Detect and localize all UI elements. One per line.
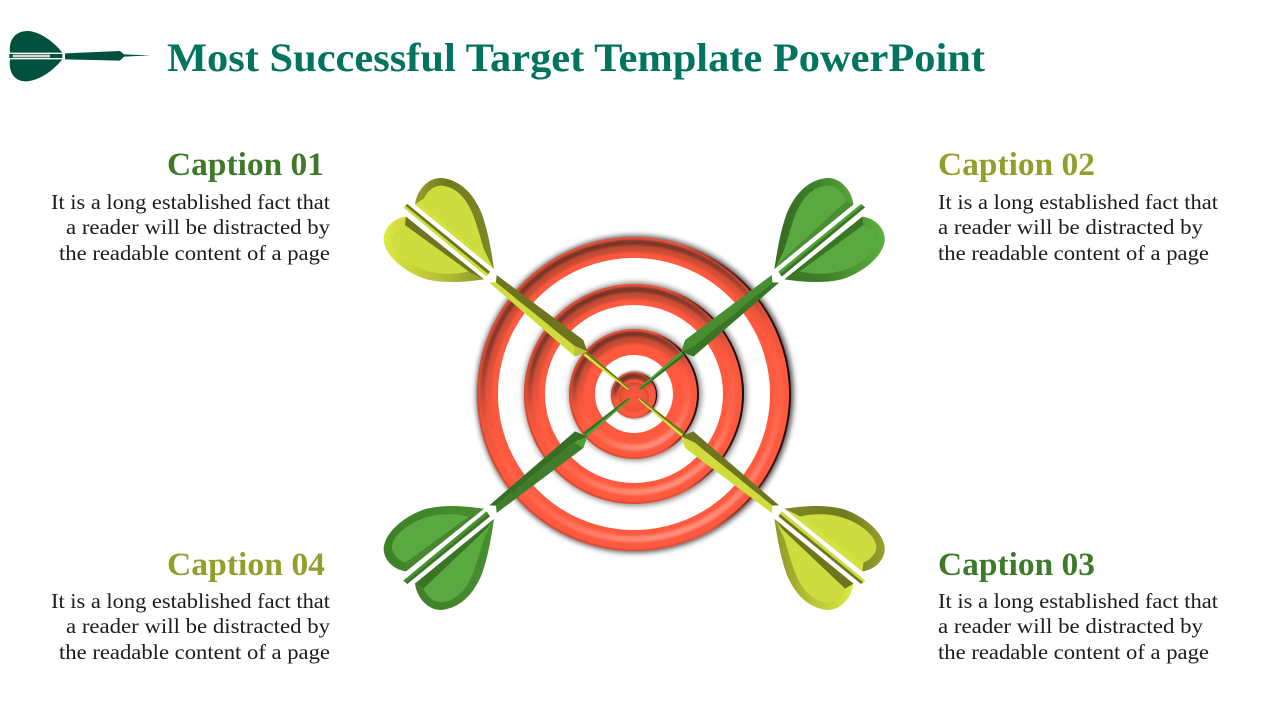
text block: caption 04: the readable content of a page xyxy=(59,640,330,664)
target xyxy=(476,236,794,552)
text block: caption 01: a reader will be distracted by xyxy=(66,215,331,239)
text block: caption 02: It is a long established fact that xyxy=(938,190,1218,214)
text block: caption 03 xyxy=(938,547,1218,664)
text block: caption 04: It is a long established fact that xyxy=(51,589,330,613)
dart 2: top right, green xyxy=(638,178,885,390)
text block: caption 03: Caption 03 xyxy=(938,547,1095,583)
dart 4: bottom left, green xyxy=(384,398,630,610)
icon: header dart xyxy=(9,31,151,81)
text block: caption 02: the readable content of a page xyxy=(938,241,1209,265)
text block: caption 03: a reader will be distracted by xyxy=(938,614,1204,638)
text block: caption 04: Caption 04 xyxy=(167,547,325,583)
text block: caption 04 xyxy=(51,547,331,664)
text block: caption 01 xyxy=(51,147,331,265)
text block: caption 01: It is a long established fact that xyxy=(51,190,330,214)
text block: caption 02: Caption 02 xyxy=(938,147,1095,183)
text block: caption 01: Caption 01 xyxy=(167,147,324,183)
text block: caption 02 xyxy=(938,147,1218,265)
text block: caption 03: It is a long established fact that xyxy=(938,589,1218,613)
text block: caption 04: a reader will be distracted by xyxy=(66,614,331,638)
text block: caption 02: a reader will be distracted by xyxy=(938,215,1204,239)
text block: caption 01: the readable content of a page xyxy=(59,241,330,265)
text block: caption 03: the readable content of a page xyxy=(938,640,1209,664)
title: Most Successful Target Template PowerPoint xyxy=(167,35,986,80)
dart 1: top left, yellow xyxy=(384,178,630,390)
dart 3: bottom right, yellow xyxy=(638,398,885,610)
